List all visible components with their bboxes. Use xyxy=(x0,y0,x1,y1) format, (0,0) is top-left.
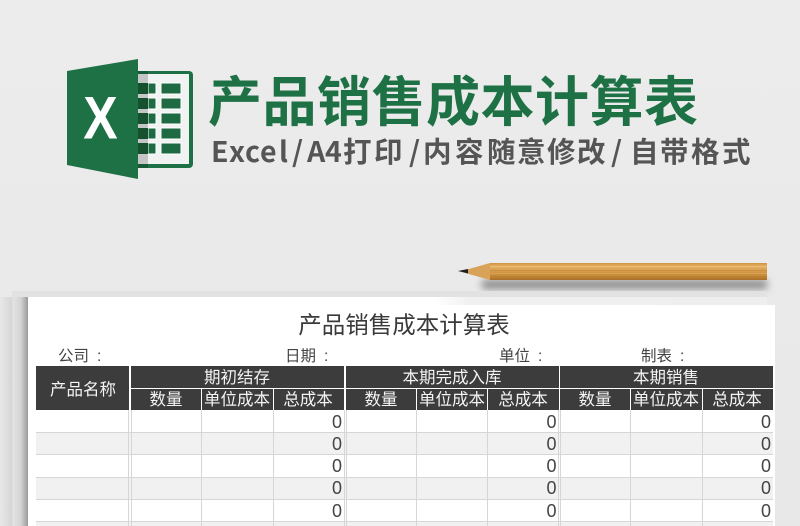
table header: 数量 xyxy=(364,390,398,409)
meta labels: : xyxy=(97,348,101,365)
meta labels xyxy=(58,347,684,365)
meta labels: : xyxy=(324,348,328,365)
meta labels: 日期 xyxy=(285,348,316,365)
icon: Excel logo xyxy=(67,59,193,179)
table header: 总成本 xyxy=(283,390,333,409)
icon: pencil xyxy=(458,263,767,289)
back sheet shadow xyxy=(0,297,28,526)
subtitle: Excel/A4打印/内容随意修改/自带格式 xyxy=(211,130,751,171)
meta labels: 单位 xyxy=(499,348,530,365)
sheet title: 产品销售成本计算表 xyxy=(298,312,510,338)
meta labels: 制表 xyxy=(641,348,672,365)
meta labels: : xyxy=(680,348,684,365)
zero values: 0 xyxy=(332,412,342,432)
title: 产品销售成本计算表 xyxy=(208,58,698,137)
top sheet edge xyxy=(12,291,767,297)
table rows xyxy=(36,410,773,526)
table header: 数量 xyxy=(578,390,612,409)
panel: spreadsheet sheet xyxy=(28,297,775,526)
table header: 本期完成入库 xyxy=(402,368,502,387)
zero values: 0 xyxy=(332,456,342,476)
table header: 期初结存 xyxy=(204,368,270,387)
table header: 数量 xyxy=(150,390,182,409)
table header: 总成本 xyxy=(498,390,548,409)
meta labels: : xyxy=(538,348,542,365)
zero values: 0 xyxy=(546,434,556,454)
zero values: 0 xyxy=(546,501,556,521)
table header: 单位成本 xyxy=(204,390,270,409)
meta labels: 公司 xyxy=(58,348,89,365)
icon: Excel logo: X xyxy=(83,84,118,151)
zero values: 0 xyxy=(332,478,342,498)
table header: 本期销售 xyxy=(633,368,699,387)
zero values: 0 xyxy=(546,412,556,432)
zero values: 0 xyxy=(761,501,771,521)
table header xyxy=(36,366,773,410)
zero values: 0 xyxy=(546,456,556,476)
zero values: 0 xyxy=(761,456,771,476)
zero values: 0 xyxy=(546,478,556,498)
table header: 总成本 xyxy=(712,390,762,409)
zero values: 0 xyxy=(761,434,771,454)
zero values: 0 xyxy=(332,501,342,521)
zero values xyxy=(332,412,771,521)
table header: 单位成本 xyxy=(419,390,485,409)
table header: 产品名称 xyxy=(50,380,116,399)
zero values: 0 xyxy=(332,434,342,454)
table header: 单位成本 xyxy=(633,390,699,409)
zero values: 0 xyxy=(761,478,771,498)
zero values: 0 xyxy=(761,412,771,432)
